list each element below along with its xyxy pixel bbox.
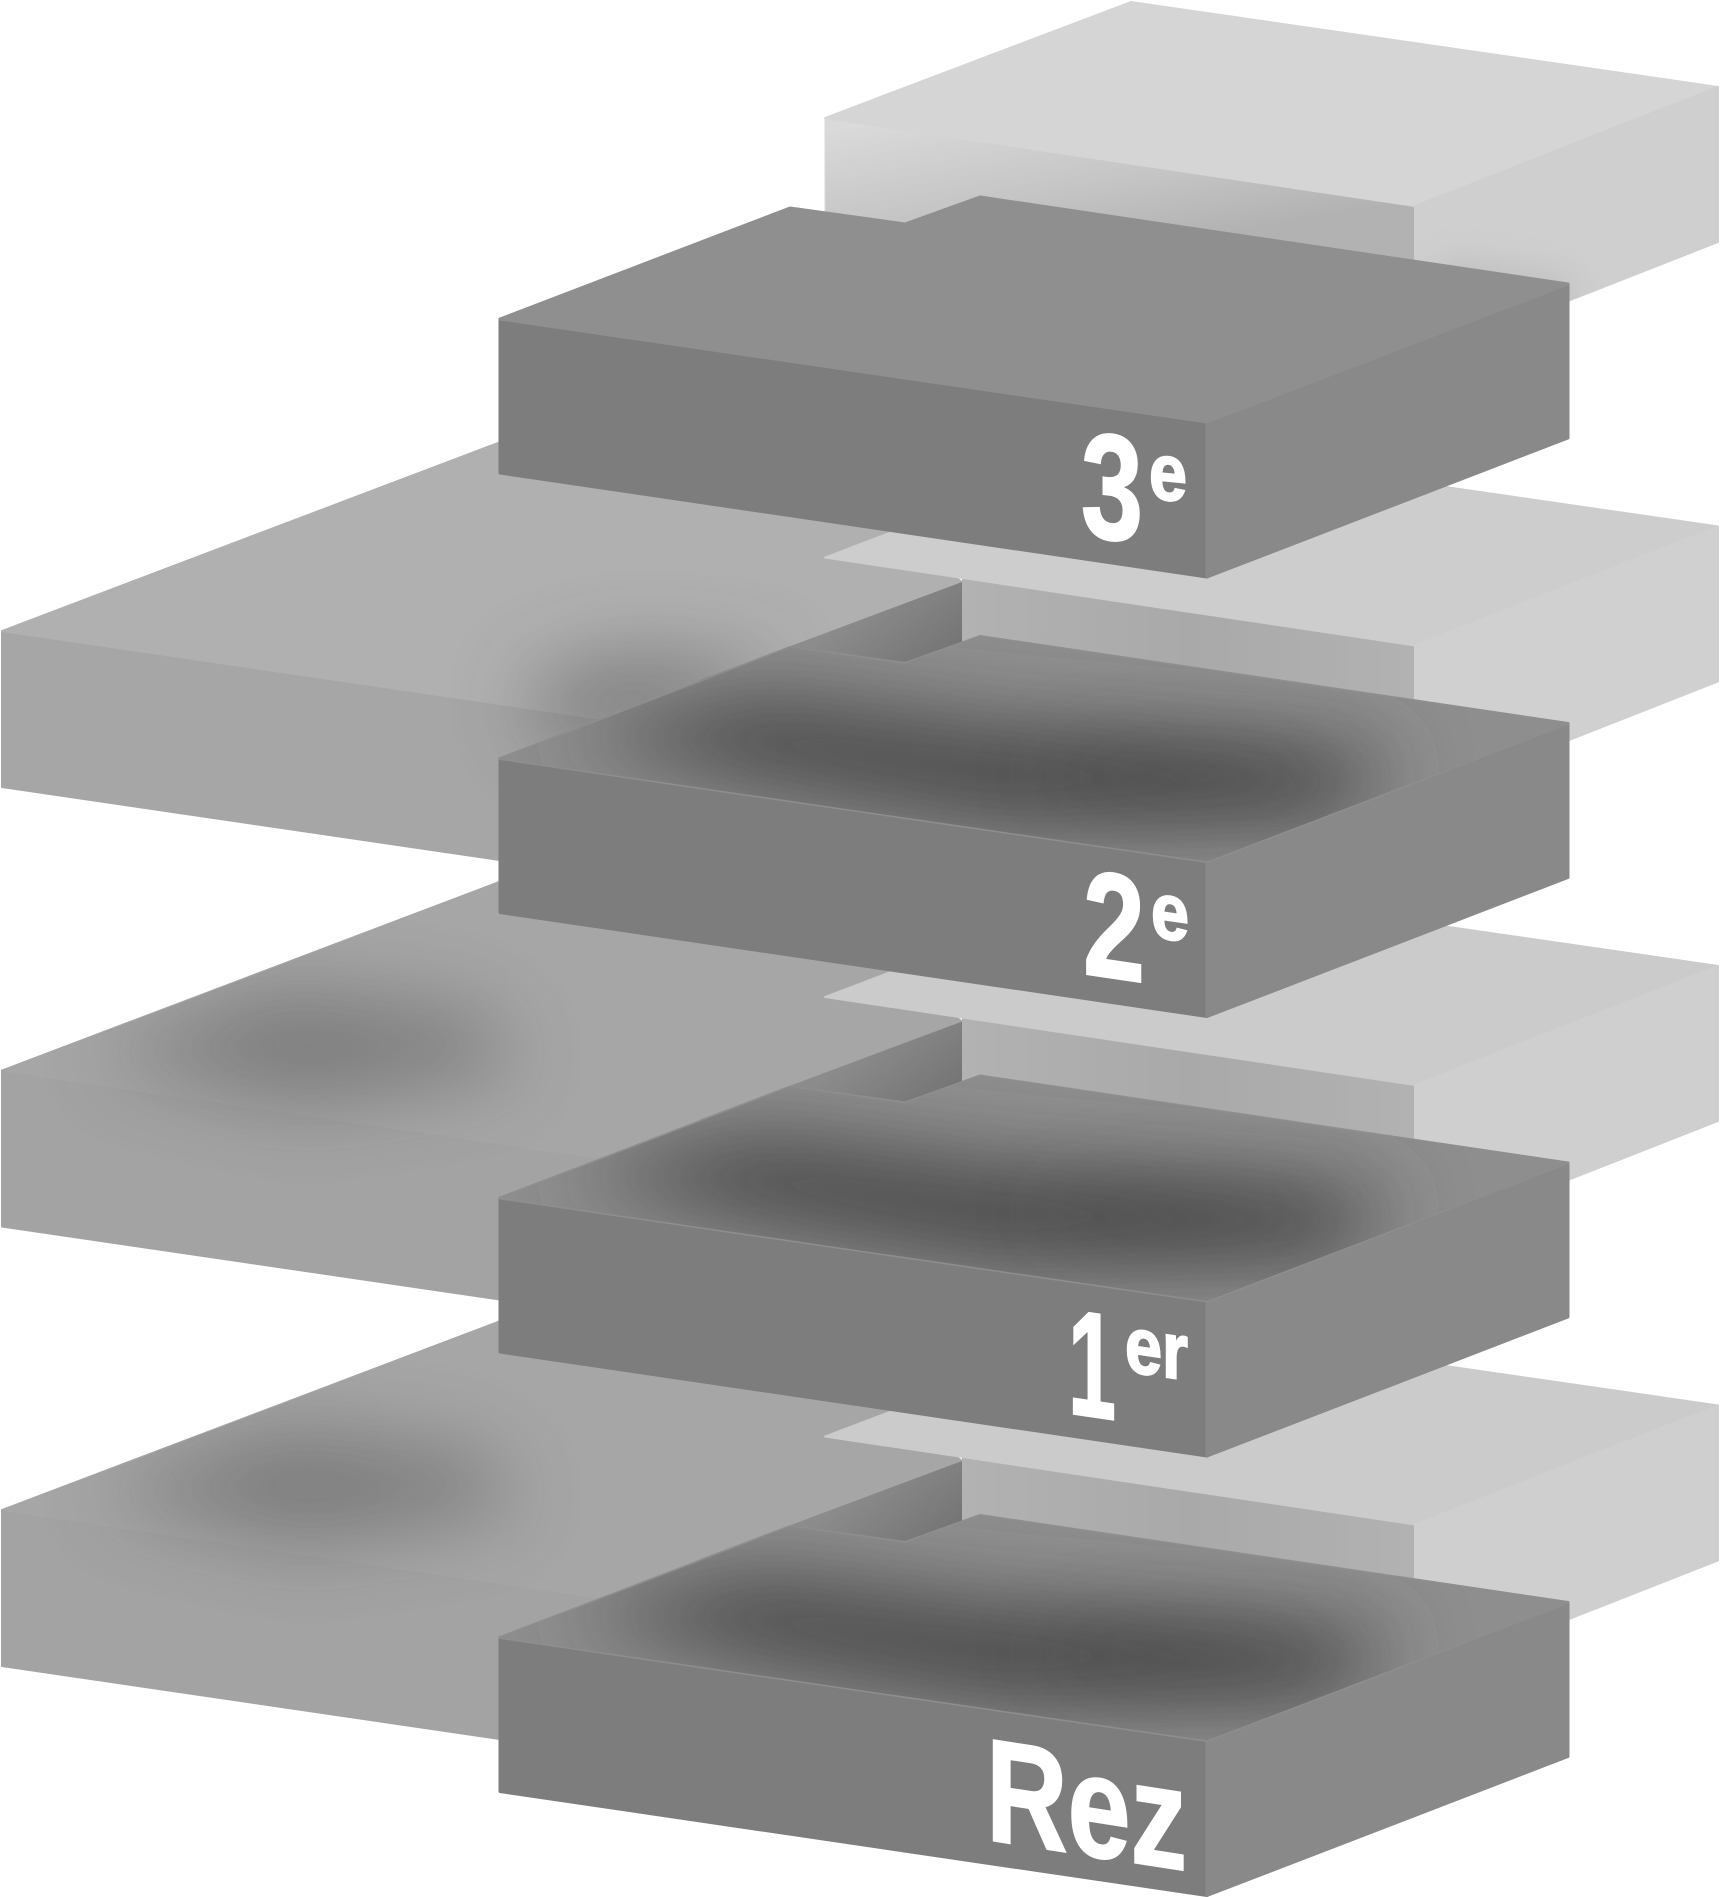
block: back right, Rez — [825, 1320, 1718, 1680]
block: back right, 2e — [825, 442, 1718, 800]
block: back right, 1er — [825, 881, 1718, 1240]
block: back right, 3e — [824, 1, 1719, 302]
block: front dark, 2e — [500, 636, 1568, 1016]
label: 3e: 3 — [1081, 400, 1143, 574]
level: Rez — [2, 1298, 1718, 1897]
block: front dark, 3e — [500, 197, 1568, 577]
block: left wing, Rez — [2, 1298, 962, 1754]
label: 3e: e — [1149, 425, 1187, 519]
block: left wing, 1er — [2, 859, 962, 1314]
label: 1er: 1 — [1068, 1277, 1116, 1452]
block: front dark, 1er — [500, 1076, 1568, 1456]
label: 2e: 2 — [1083, 837, 1145, 1014]
label: 1er: er — [1125, 1299, 1188, 1398]
level: 3e — [500, 2, 1718, 577]
block: front dark, Rez — [500, 1516, 1568, 1896]
block: left wing, 2e — [2, 420, 962, 875]
level: 2e — [2, 420, 1718, 1016]
label: 2e: e — [1151, 865, 1189, 960]
label: 1er — [1068, 1277, 1188, 1452]
level: 1er — [2, 859, 1718, 1456]
